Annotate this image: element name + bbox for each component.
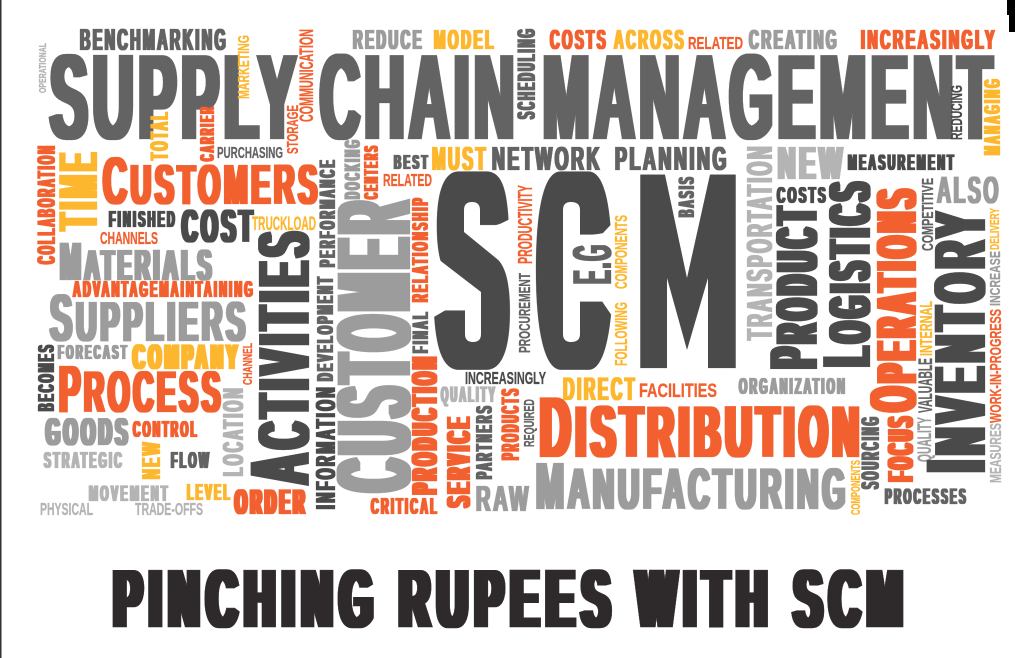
panel: word cloud: CRITICAL [371,493,439,519]
word: TRADE-OFFS: TRADE-OFFS [135,499,203,519]
panel: word cloud: CREATING [749,24,839,55]
panel: word cloud: ADVANTAGEMAINTAINING [73,276,255,302]
word: SUPPLIERS: SUPPLIERS [50,281,249,356]
counters of S [429,202,516,342]
word: OPERATIONAL: OPERATIONAL [38,43,49,93]
word: STORAGE: STORAGE [285,105,302,154]
word: PLANNING: PLANNING [615,141,729,178]
corner mark [1007,0,1015,32]
word: FOLLOWING: FOLLOWING [611,302,631,366]
panel: word cloud: TOTAL [147,110,174,160]
notches of M [664,170,711,372]
panel: word cloud: PRODUCT [756,203,832,368]
panel: word cloud: CARRIER [197,105,219,161]
word: RELATED: RELATED [688,33,743,53]
panel: word cloud: S [446,115,499,427]
panel: word cloud: BEST [394,152,430,174]
panel: word cloud: PARTNERS [471,404,497,479]
panel: word cloud: COSTS [550,24,608,55]
panel: word cloud: FINISHED [109,206,177,232]
word: PRODUCTIVITY: PRODUCTIVITY [515,185,537,264]
word: PROCESS: PROCESS [59,352,224,427]
word: CHANNEL: CHANNEL [240,343,255,385]
word: COMPONENTS: COMPONENTS [611,215,631,289]
panel: word cloud: C [547,115,599,427]
word: MATERIALS: MATERIALS [60,232,215,292]
word: INTERNAL: INTERNAL [916,301,936,356]
word: REDUCING: REDUCING [949,85,966,140]
panel: word cloud: GOODS [46,411,131,454]
panel: word cloud: DIRECT [563,371,637,407]
word: NETWORK: NETWORK [492,141,602,178]
word: COMPETITIVE: COMPETITIVE [920,178,937,251]
panel: word cloud: LEVEL [187,479,232,505]
panel: word cloud: ORDER [235,483,308,522]
panel: word cloud: RELATIONSHIP [407,196,433,302]
word: RAW: RAW [476,478,531,519]
word: PROCUREMENT: PROCUREMENT [517,273,534,353]
panel: word cloud: CHAIN [320,29,519,165]
word: CUSTOMERS: CUSTOMERS [103,144,321,219]
panel: word cloud: SUPPLY [50,29,301,165]
panel: word cloud: DOCKING [340,138,365,199]
word: PHYSICAL: PHYSICAL [40,499,93,519]
panel: word cloud: SERVICE [441,414,478,507]
panel: word cloud: TIME [47,149,109,230]
panel: word cloud: FINAL [408,310,433,353]
panel: word cloud: QUALITY [441,382,497,407]
panel: word cloud: MOVEMENT [89,481,170,506]
panel: word cloud: M [642,114,734,428]
panel: word cloud: PERFORMANCE [315,158,340,267]
panel: word cloud: FORECAST [58,342,129,364]
word: COMPONENTS: COMPONENTS [848,460,863,515]
panel: word cloud: BASIS [674,175,699,217]
panel: word cloud: DEVELOPMENT [312,275,338,381]
panel: word cloud [33,23,1005,524]
word: FACILITIES: FACILITIES [639,381,717,402]
panel: word cloud: SOURCING [858,415,885,489]
word: INCREASE: INCREASE [988,251,1004,306]
panel: word cloud: PRODUCTS [498,387,525,460]
panel: word cloud: BECOMES [33,343,59,411]
word: VALUABLE: VALUABLE [916,358,937,413]
word: WORK-IN-PROGRESS: WORK-IN-PROGRESS [988,309,1005,423]
counter of C [563,202,616,342]
word: MARKETING: MARKETING [236,35,253,99]
word: PURCHASING: PURCHASING [217,145,283,162]
word: ACTIVITIES: ACTIVITIES [233,227,327,484]
panel: word cloud: COST [182,200,256,252]
panel: word cloud: CONTROL [133,416,199,442]
panel: word cloud: MODEL [434,24,496,55]
word: MEASURES: MEASURES [988,423,1005,483]
panel: word cloud: FOCUS [880,414,921,481]
word: INCREASINGLY: INCREASINGLY [465,368,546,388]
panel: word cloud: REDUCE [353,24,424,55]
panel: word cloud: STRATEGIC [44,447,124,473]
panel: word cloud: PRODUCTION [404,354,445,494]
panel: word cloud: COMPANY [133,338,241,377]
panel: word cloud: COSTS [777,182,828,208]
word: TRUCKLOAD: TRUCKLOAD [252,214,316,235]
panel: word cloud: FLOW [171,447,211,473]
panel: word cloud: ACROSS [614,24,686,55]
word: NEW: NEW [136,440,166,479]
panel: word cloud: BENCHMARKING [80,23,228,57]
word: NEW: NEW [778,137,846,189]
word: QUALITY: QUALITY [915,417,936,462]
panel: word cloud: ORGANIZATION [739,373,847,399]
word: RELATED: RELATED [383,170,432,190]
panel: word cloud: MUST [432,141,488,178]
panel: word cloud: CENTERS [361,144,383,199]
word: CHANNELS: CHANNELS [100,228,158,248]
panel: word cloud: E.G [561,243,623,284]
word: REQUIRED: REQUIRED [522,399,538,447]
word: DELIVERY: DELIVERY [987,208,1002,250]
word: INFORMATION: INFORMATION [310,385,341,509]
panel: word cloud: LOCATION [218,386,250,476]
